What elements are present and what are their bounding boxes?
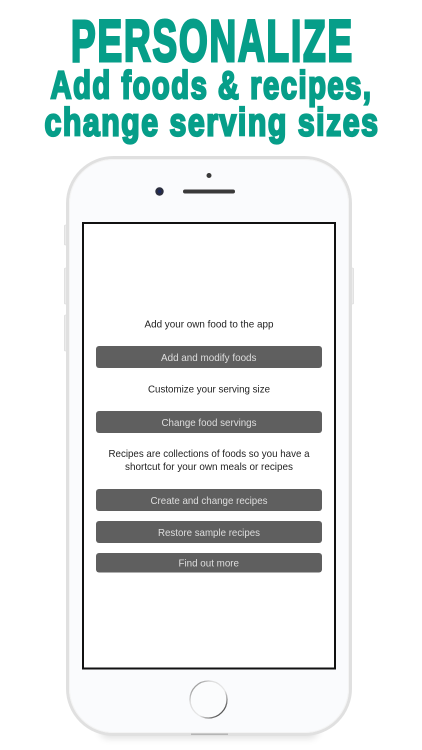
button: create and change recipes: Create and change recipes <box>150 495 268 507</box>
panel: app menu <box>96 318 322 572</box>
text: recipes explanation: Recipes are collections of foods so you have a <box>108 448 310 460</box>
icon: front sensor <box>206 173 212 178</box>
text: recipes explanation <box>108 448 310 473</box>
button: restore sample recipes: Restore sample recipes <box>158 527 260 539</box>
button: create and change recipes <box>96 489 322 511</box>
button: change food servings: Change food servings <box>162 417 256 429</box>
phone shadow <box>100 722 318 738</box>
icon: speaker <box>183 190 235 194</box>
icon: camera <box>155 187 164 196</box>
button: add and modify foods: Add and modify foods <box>161 352 256 364</box>
side buttons <box>64 225 354 351</box>
phone <box>64 158 354 738</box>
button: change food servings <box>96 411 322 433</box>
button: restore sample recipes <box>96 521 322 543</box>
title <box>44 9 380 144</box>
icon: home button <box>190 681 227 718</box>
text: recipes explanation: shortcut for your own meals or recipes <box>125 461 293 473</box>
screen <box>83 223 335 668</box>
button: find out more <box>96 553 322 572</box>
bottom edge highlight <box>191 734 228 735</box>
button: find out more: Find out more <box>178 558 239 570</box>
text: customize serving: Customize your serving size <box>148 384 270 396</box>
button: add and modify foods <box>96 346 322 368</box>
text: add food: Add your own food to the app <box>144 318 274 330</box>
phone body <box>68 158 350 734</box>
